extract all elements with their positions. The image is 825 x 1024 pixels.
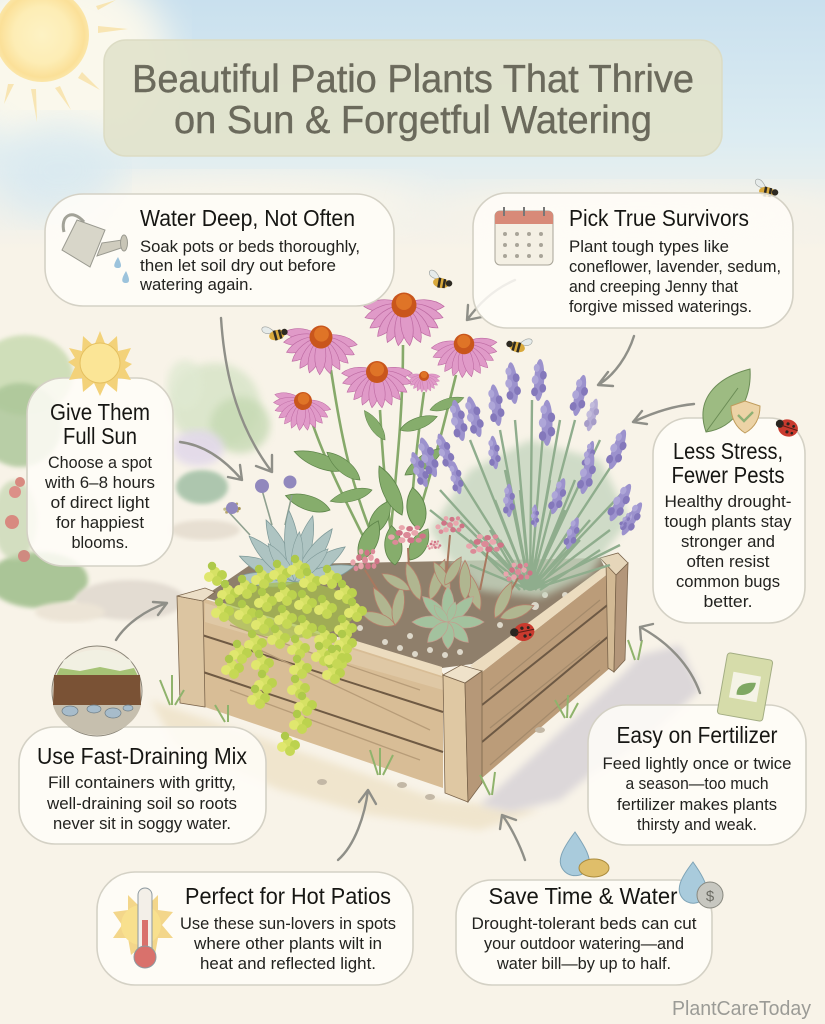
- panel: Pick True Survivors: [473, 193, 793, 328]
- background foliage and shrubs: [0, 335, 270, 622]
- background: sky wash: [0, 0, 825, 250]
- icon: water drop and dollar coin: [679, 862, 723, 908]
- coneflower plant: [267, 292, 500, 566]
- text: Plant tough types like: [569, 237, 729, 256]
- watermark: PlantCareToday: [672, 998, 811, 1020]
- panel: Easy on Fertilizer: [588, 652, 806, 845]
- creeping Jenny trailing over the edge: [204, 555, 367, 756]
- ladybug on the bed: [509, 621, 536, 644]
- grass tufts and gravel: [160, 640, 642, 800]
- text: Full Sun: [63, 423, 137, 449]
- bees: [261, 179, 780, 355]
- text: watering again.: [139, 275, 253, 294]
- text: a season—too much: [626, 774, 768, 793]
- text: water bill—by up to half.: [496, 954, 671, 973]
- text: Choose a spot: [48, 453, 152, 472]
- text: [602, 722, 792, 834]
- text: Fill containers with gritty,: [48, 773, 236, 792]
- icon: watering can: [62, 215, 129, 283]
- text: common bugs: [676, 572, 780, 591]
- text: coneflower, lavender, sedum,: [569, 257, 781, 276]
- panel: Perfect for Hot Patios: [97, 872, 413, 985]
- text: heat and reflected light.: [200, 954, 376, 973]
- panel: Use Fast-Draining Mix: [19, 646, 266, 844]
- text: well-draining soil so roots: [46, 794, 237, 813]
- text: [180, 883, 396, 973]
- text: Less Stress,: [673, 438, 783, 464]
- text: [44, 399, 155, 552]
- text: Perfect for Hot Patios: [185, 883, 391, 909]
- lavender flower spikes: [406, 359, 647, 551]
- text: Pick True Survivors: [569, 205, 749, 231]
- text: Fewer Pests: [672, 462, 784, 488]
- panel: Less Stress, Fewer Pests: [653, 369, 805, 623]
- text: Healthy drought-: [664, 492, 792, 511]
- icon: soil cross-section: [52, 646, 142, 736]
- icon: sun: [68, 331, 132, 396]
- text: [139, 205, 360, 294]
- icon: water drop and dollar coin: $: [706, 888, 715, 905]
- panel: Water Deep, Not Often: [45, 194, 394, 306]
- text: Drought-tolerant beds can cut: [472, 914, 697, 933]
- text: Feed lightly once or twice: [602, 754, 792, 773]
- panel: title: [104, 40, 722, 156]
- text: Save Time & Water: [488, 883, 678, 909]
- text: Give Them: [50, 399, 150, 425]
- raised wooden bed: [177, 553, 628, 802]
- sedum with pink clusters: [350, 516, 536, 649]
- text: Use Fast-Draining Mix: [37, 743, 247, 769]
- icon: leaf and shield: [703, 369, 760, 433]
- icon: water drop and coins: [560, 832, 609, 877]
- title text: Beautiful Patio Plants That Thrive: [132, 58, 694, 101]
- panel: Give Them Full Sun: [27, 331, 173, 566]
- text: Use these sun-lovers in spots: [180, 914, 396, 933]
- text: your outdoor watering—and: [484, 934, 684, 953]
- right wall: [470, 566, 610, 778]
- icon: thermometer and sun: [113, 888, 173, 968]
- text: [472, 883, 697, 973]
- text: tough plants stay: [664, 512, 792, 531]
- text: [37, 743, 247, 833]
- text: often resist: [686, 552, 770, 571]
- text: Easy on Fertilizer: [616, 722, 778, 748]
- text: then let soil dry out before: [140, 256, 336, 275]
- text: thirsty and weak.: [637, 815, 757, 834]
- silver succulent with stems: [223, 476, 356, 589]
- left wall: [202, 598, 443, 788]
- ground patches under the bed: [150, 645, 700, 830]
- text: forgive missed waterings.: [569, 297, 752, 316]
- text: with 6–8 hours: [44, 473, 155, 492]
- text: [664, 438, 792, 611]
- arrows: [116, 280, 700, 860]
- icon: ladybug: [773, 416, 800, 439]
- corner posts: [177, 553, 628, 802]
- text: never sit in soggy water.: [53, 814, 231, 833]
- text: blooms.: [72, 533, 128, 552]
- icon: fertilizer bag: [717, 652, 773, 722]
- text: stronger and: [681, 532, 775, 551]
- text: better.: [704, 592, 752, 611]
- text: fertilizer makes plants: [617, 795, 777, 814]
- text: [569, 205, 781, 316]
- flower heads: [267, 292, 500, 437]
- text: Soak pots or beds thoroughly,: [140, 237, 360, 256]
- icon: sun in sky: [0, 0, 128, 122]
- text: of direct light: [50, 493, 150, 512]
- title text: [132, 58, 694, 142]
- lavender plant: [406, 359, 647, 598]
- text: and creeping Jenny that: [569, 277, 738, 296]
- soil and pebbles: [203, 558, 606, 668]
- icon: calendar: [495, 207, 553, 265]
- panel: Save Time & Water: [456, 832, 723, 985]
- title text: on Sun & Forgetful Watering: [174, 99, 652, 142]
- text: where other plants wilt in: [193, 934, 382, 953]
- text: Water Deep, Not Often: [140, 205, 355, 231]
- pink flower clusters: [350, 516, 533, 581]
- text: for happiest: [56, 513, 144, 532]
